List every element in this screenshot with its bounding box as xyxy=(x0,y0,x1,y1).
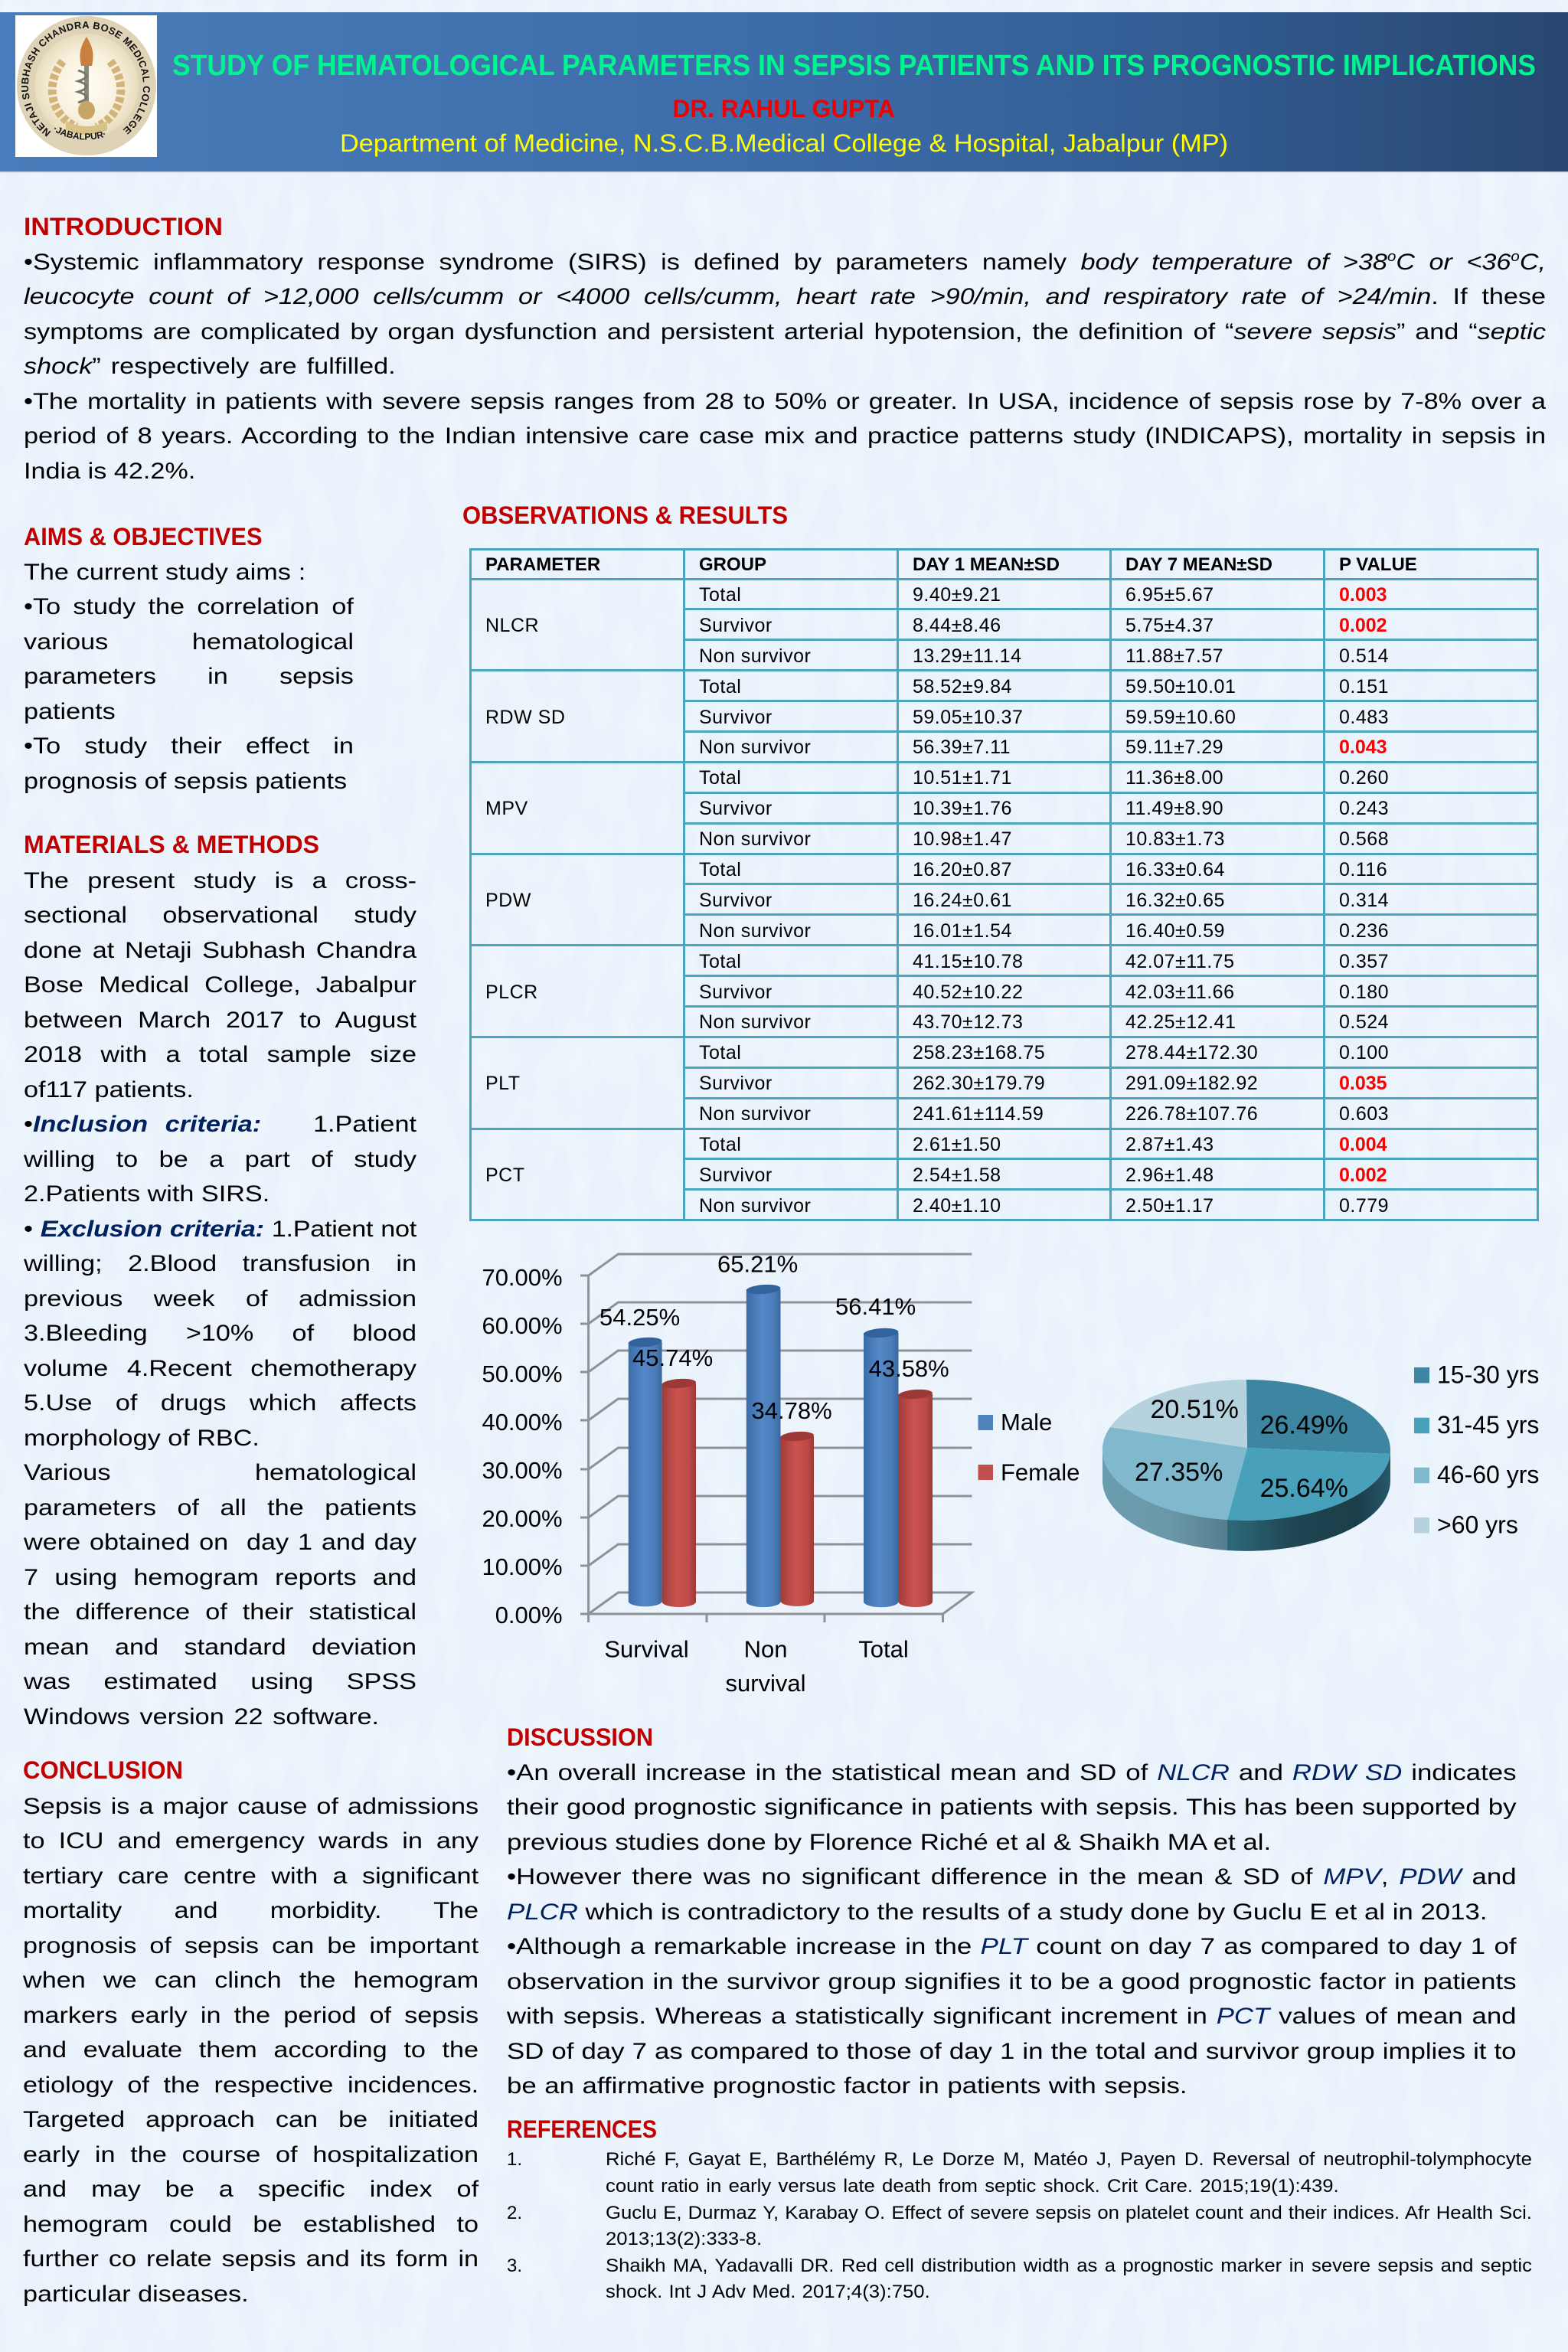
text: reference list: shock. Int J Adv Med. 2017;4(3):750. xyxy=(606,2282,930,2302)
text: introduction body: period of 8 years. According to the Indian intensive care case mix and practice patterns study (INDICAPS), mortality in sepsis in xyxy=(24,423,1546,449)
table: hematological parameters: 42.07±11.75 xyxy=(1125,951,1234,972)
table: hematological parameters: PCT xyxy=(485,1165,525,1186)
table: hematological parameters: Non survivor xyxy=(699,828,811,850)
text: materials and methods body: were obtained on day 1 and day xyxy=(24,1530,416,1555)
panel: materials and methods xyxy=(24,831,416,1730)
text: introduction body: leucocyte count of >12,000 cells/cumm or <4000 cells/cumm, heart rate >90/min, and respiratory rate of >24/min. If these xyxy=(24,284,1546,309)
table: hematological parameters: Survivor xyxy=(699,798,773,819)
text: discussion body xyxy=(507,1755,1517,2104)
table: hematological parameters: Survivor xyxy=(699,706,773,727)
text: materials and methods body: parameters of all the patients xyxy=(24,1495,416,1521)
text: aims body: •To study the correlation of xyxy=(24,594,354,619)
text: materials and methods body: volume 4.Recent chemotherapy xyxy=(24,1356,416,1381)
text: aims body: various hematological xyxy=(24,629,354,655)
table: hematological parameters: Total xyxy=(699,767,741,789)
legend: gender: Male xyxy=(1001,1409,1052,1436)
text: reference list: Shaikh MA, Yadavalli DR. Red cell distribution width as a prognostic marker in severe sepsis and septic xyxy=(606,2256,1532,2276)
pie side wall xyxy=(1102,1450,1390,1551)
table: hematological parameters: 0.002 xyxy=(1339,1165,1387,1186)
text: materials and methods body: 2018 with a total sample size xyxy=(24,1042,416,1067)
category labels xyxy=(604,1635,909,1697)
text: materials and methods body: Bose Medical College, Jabalpur xyxy=(24,972,416,998)
table: hematological parameters: 0.035 xyxy=(1339,1073,1387,1094)
logo: medical college emblem: ·JABALPUR· xyxy=(54,127,105,140)
table: hematological parameters: 0.483 xyxy=(1339,706,1389,727)
text: conclusion body: Targeted approach can be initiated xyxy=(23,2107,479,2132)
y axis labels: 60.00% xyxy=(482,1312,563,1339)
panel: references xyxy=(507,2109,1533,2308)
table: hematological parameters: 2.50±1.17 xyxy=(1125,1195,1214,1217)
text: materials and methods body: between March 2017 to August xyxy=(24,1008,416,1033)
table: hematological parameters: 11.36±8.00 xyxy=(1125,767,1223,789)
text: discussion body: with sepsis. Whereas a statistically significant increment in PCT values of mean and xyxy=(507,2004,1517,2029)
text: discussion body: SD of day 7 as compared to those of day 1 in the total and survivor group implies it to xyxy=(507,2038,1517,2064)
data labels: 43.58% xyxy=(869,1355,949,1382)
table: hematological parameters: Non survivor xyxy=(699,920,811,942)
reference numbers: 3. xyxy=(507,2256,522,2276)
table: hematological parameters: 10.83±1.73 xyxy=(1125,828,1225,850)
text: materials and methods body: Various hematological xyxy=(24,1460,416,1485)
bars: total xyxy=(864,1327,933,1607)
table: hematological parameters: 5.75±4.37 xyxy=(1125,615,1214,636)
text: introduction body xyxy=(24,249,1547,484)
y axis labels: 40.00% xyxy=(482,1409,563,1436)
table: hematological parameters: 2.54±1.58 xyxy=(913,1165,1001,1186)
text: conclusion body xyxy=(23,1789,479,2311)
table: hematological parameters: Non survivor xyxy=(699,1103,811,1125)
department: Department of Medicine, N.S.C.B.Medical College & Hospital, Jabalpur (MP) xyxy=(340,129,1228,157)
text: conclusion body: mortality and morbidity. The xyxy=(23,1898,479,1923)
table: hematological parameters: PDW xyxy=(485,890,531,911)
text: materials and methods body: 3.Bleeding >10% of blood xyxy=(24,1321,416,1346)
pie chart: age distribution xyxy=(1095,1355,1568,1562)
table: hematological parameters: RDW SD xyxy=(485,706,565,727)
text: materials and methods body: of117 patients. xyxy=(24,1077,193,1102)
table: hematological parameters: Total xyxy=(699,859,741,880)
text: aims body: The current study aims : xyxy=(24,560,305,585)
data labels: 45.74% xyxy=(632,1344,713,1371)
text: materials and methods body: willing; 2.Blood transfusion in xyxy=(24,1251,416,1276)
heading: aims and objectives: AIMS & OBJECTIVES xyxy=(24,523,262,550)
text: reference list: Guclu E, Durmaz Y, Karabay O. Effect of severe sepsis on platelet count and their indices. Afr Health Sci. xyxy=(606,2203,1532,2223)
text: conclusion body: and may be a specific index of xyxy=(23,2177,479,2202)
reference numbers xyxy=(507,2147,553,2306)
heading: references: REFERENCES xyxy=(507,2115,657,2143)
table: hematological parameters: Total xyxy=(699,951,741,972)
category labels: survival xyxy=(725,1670,806,1697)
table: hematological parameters: Non survivor xyxy=(699,645,811,667)
text: discussion body: observation in the survivor group signifies it to be a good prognostic factor in patients xyxy=(507,1969,1517,1994)
table: hematological parameters: 42.03±11.66 xyxy=(1125,982,1234,1003)
y axis labels: 70.00% xyxy=(482,1264,563,1291)
text: materials and methods body: 5.Use of drugs which affects xyxy=(24,1390,416,1416)
table: hematological parameters xyxy=(469,548,1539,1221)
table: hematological parameters: Total xyxy=(699,1042,741,1063)
heading: discussion: DISCUSSION xyxy=(507,1723,653,1751)
y axis labels xyxy=(482,1264,563,1628)
text: introduction body: shock” respectively are fulfilled. xyxy=(24,354,396,379)
bars: survival xyxy=(628,1336,696,1607)
data labels: 54.25% xyxy=(599,1304,680,1331)
y axis labels: 30.00% xyxy=(482,1457,563,1484)
table: hematological parameters: 41.15±10.78 xyxy=(913,951,1023,972)
table: hematological parameters: 0.002 xyxy=(1339,615,1387,636)
text: discussion body: •An overall increase in the statistical mean and SD of NLCR and RDW SD indicates xyxy=(507,1759,1517,1785)
table: hematological parameters: 262.30±179.79 xyxy=(913,1073,1045,1094)
heading: materials and methods: MATERIALS & METHODS xyxy=(24,831,319,858)
table: hematological parameters: 59.50±10.01 xyxy=(1125,676,1236,697)
table: hematological parameters: Non survivor xyxy=(699,1195,811,1217)
table: hematological parameters: 40.52±10.22 xyxy=(913,982,1023,1003)
text: conclusion body: etiology of the respective incidences. xyxy=(23,2073,479,2098)
table: hematological parameters: 0.004 xyxy=(1339,1134,1387,1155)
text: materials and methods body: The present study is a cross- xyxy=(24,868,416,893)
table: hematological parameters: 10.39±1.76 xyxy=(913,798,1012,819)
table: hematological parameters: 2.61±1.50 xyxy=(913,1134,1001,1155)
heading: observations and results: OBSERVATIONS & RESULTS xyxy=(462,501,788,529)
text: introduction body: India is 42.2%. xyxy=(24,459,195,484)
bars: non survival xyxy=(746,1283,814,1607)
table: hematological parameters: 278.44±172.30 xyxy=(1125,1042,1258,1063)
table: hematological parameters: 59.59±10.60 xyxy=(1125,706,1236,727)
table: hematological parameters: 0.779 xyxy=(1339,1195,1389,1217)
text: materials and methods body xyxy=(24,868,416,1730)
table: hematological parameters: 2.87±1.43 xyxy=(1125,1134,1214,1155)
table: hematological parameters: 42.25±12.41 xyxy=(1125,1011,1236,1033)
text: aims body: •To study their effect in xyxy=(24,733,354,759)
slice: over 60 yrs xyxy=(1110,1380,1247,1448)
table: hematological parameters: 226.78±107.76 xyxy=(1125,1103,1258,1125)
text: aims body xyxy=(24,560,354,794)
text: discussion body: PLCR which is contradictory to the results of a study done by Guclu E et al in 2013. xyxy=(507,1899,1488,1925)
text: discussion body: their good prognostic significance in patients with sepsis. This has been supported by xyxy=(507,1795,1517,1820)
table: hematological parameters: MPV xyxy=(485,798,528,819)
y axis labels: 0.00% xyxy=(495,1602,563,1628)
panel: observations and results xyxy=(462,498,1542,1225)
table: hematological parameters: 0.180 xyxy=(1339,982,1389,1003)
table: hematological parameters: 8.44±8.46 xyxy=(913,615,1001,636)
table: hematological parameters: 16.33±0.64 xyxy=(1125,859,1225,880)
text: introduction body: •The mortality in patients with severe sepsis ranges from 28 to 50% or greater. In USA, incidence of sepsis rose by 7-8% over a xyxy=(24,389,1546,414)
table: hematological parameters: 16.32±0.65 xyxy=(1125,890,1225,911)
category labels: Survival xyxy=(604,1635,689,1663)
panel: introduction xyxy=(24,213,1547,484)
legend: age groups: 31-45 yrs xyxy=(1437,1411,1539,1439)
y axis labels: 50.00% xyxy=(482,1361,563,1387)
table: hematological parameters: Total xyxy=(699,1134,741,1155)
table: hematological parameters: 258.23±168.75 xyxy=(913,1042,1045,1063)
text: discussion body: previous studies done by Florence Riché et al & Shaikh MA et al. xyxy=(507,1830,1271,1854)
table: hematological parameters: 0.514 xyxy=(1339,645,1389,667)
legend: age groups: 46-60 yrs xyxy=(1437,1461,1539,1488)
chart axes and gridlines xyxy=(580,1254,972,1622)
text: reference list: 2013;13(2):333-8. xyxy=(606,2229,762,2249)
table: hematological parameters: Survivor xyxy=(699,1073,773,1094)
panel: discussion xyxy=(507,1719,1517,2109)
table: hematological parameters: 0.151 xyxy=(1339,676,1389,697)
text: conclusion body: prognosis of sepsis can be important xyxy=(23,1933,479,1958)
table: hematological parameters: 13.29±11.14 xyxy=(913,645,1021,667)
category labels: Non xyxy=(744,1635,787,1663)
table: hematological parameters: 0.260 xyxy=(1339,767,1389,789)
text: materials and methods body: previous week of admission xyxy=(24,1286,416,1312)
table: hematological parameters: Survivor xyxy=(699,982,773,1003)
text: aims body: prognosis of sepsis patients xyxy=(24,769,347,794)
table: hematological parameters: 0.314 xyxy=(1339,890,1389,911)
legend: age groups xyxy=(1414,1361,1539,1539)
table: hematological parameters: 11.88±7.57 xyxy=(1125,645,1223,667)
text: materials and methods body: 2.Patients with SIRS. xyxy=(24,1181,270,1207)
legend: age groups: >60 yrs xyxy=(1437,1511,1518,1539)
text: aims body: parameters in sepsis xyxy=(24,664,354,689)
slice: 46-60 yrs xyxy=(1102,1427,1247,1520)
table: hematological parameters: 6.95±5.67 xyxy=(1125,584,1214,606)
text: materials and methods body: sectional observational study xyxy=(24,903,416,928)
table: hematological parameters: 9.40±9.21 xyxy=(913,584,1001,606)
table: hematological parameters: Survivor xyxy=(699,1165,773,1186)
table: hematological parameters: 16.20±0.87 xyxy=(913,859,1012,880)
heading: introduction: INTRODUCTION xyxy=(24,213,223,240)
table: hematological parameters: 16.01±1.54 xyxy=(913,920,1012,942)
table: hematological parameters: 59.05±10.37 xyxy=(913,706,1023,727)
data labels: 56.41% xyxy=(835,1293,916,1320)
text: materials and methods body: •Inclusion criteria: 1.Patient xyxy=(24,1112,416,1137)
text: reference list: Riché F, Gayat E, Barthélémy R, Le Dorze M, Matéo J, Payen D. Reversal of neutrophil-tolymphocyte xyxy=(606,2149,1532,2170)
text: materials and methods body: mean and standard deviation xyxy=(24,1635,416,1660)
text: materials and methods body: 7 using hemogram reports and xyxy=(24,1565,416,1590)
table: hematological parameters: 2.40±1.10 xyxy=(913,1195,1001,1217)
text: conclusion body: and evaluate them according to the xyxy=(23,2037,479,2063)
pie labels xyxy=(1135,1395,1348,1503)
logo: medical college emblem: NETAJI SUBHASH CHANDRA BOSE MEDICAL COLLEGE xyxy=(21,21,150,136)
table: hematological parameters: 0.243 xyxy=(1339,798,1389,819)
text: conclusion body: early in the course of hospitalization xyxy=(23,2142,479,2167)
category labels: Total xyxy=(858,1635,909,1663)
text: introduction body: •Systemic inflammatory response syndrome (SIRS) is defined by parameters namely body temperature of >38oC or <36oC, xyxy=(24,249,1546,275)
pie labels: 26.49% xyxy=(1260,1411,1348,1440)
table: hematological parameters: 0.100 xyxy=(1339,1042,1389,1063)
table: hematological parameters: 16.24±0.61 xyxy=(913,890,1012,911)
table: hematological parameters: PLCR xyxy=(485,982,538,1003)
reference numbers: 2. xyxy=(507,2203,522,2223)
text: materials and methods body: Windows version 22 software. xyxy=(24,1704,379,1730)
table: hematological parameters: 0.116 xyxy=(1339,859,1387,880)
table: hematological parameters: DAY 1 MEAN±SD xyxy=(913,554,1060,575)
text: conclusion body: Sepsis is a major cause of admissions xyxy=(23,1794,479,1819)
panel: aims and objectives xyxy=(24,523,354,794)
table: hematological parameters: 10.51±1.71 xyxy=(913,767,1012,789)
pie labels: 25.64% xyxy=(1260,1474,1348,1503)
table: hematological parameters: 0.357 xyxy=(1339,951,1389,972)
text: discussion body: be an affirmative prognostic factor in patients with sepsis. xyxy=(507,2073,1187,2099)
table: hematological parameters: GROUP xyxy=(699,554,766,575)
legend: gender: Female xyxy=(1001,1459,1080,1485)
table: hematological parameters: Non survivor xyxy=(699,1011,811,1033)
table: hematological parameters: 43.70±12.73 xyxy=(913,1011,1023,1033)
table: hematological parameters: 2.96±1.48 xyxy=(1125,1165,1214,1186)
table: hematological parameters: 0.003 xyxy=(1339,584,1387,606)
y axis labels: 20.00% xyxy=(482,1505,563,1532)
text: materials and methods body: done at Netaji Subhash Chandra xyxy=(24,938,416,963)
slice: 31-45 yrs xyxy=(1227,1448,1390,1521)
table: hematological parameters: Total xyxy=(699,584,741,606)
table: hematological parameters: 241.61±114.59 xyxy=(913,1103,1044,1125)
text: materials and methods body: morphology of RBC. xyxy=(24,1426,260,1451)
table: hematological parameters: 10.98±1.47 xyxy=(913,828,1012,850)
text: reference list xyxy=(606,2147,1532,2306)
table: hematological parameters: 0.043 xyxy=(1339,737,1387,758)
text: conclusion body: tertiary care centre with a significant xyxy=(23,1864,479,1889)
data labels: 34.78% xyxy=(752,1397,832,1424)
text: reference list: count ratio in early versus late death from septic shock. Crit Care. 2015;19(1):439. xyxy=(606,2176,1339,2197)
table: hematological parameters: PARAMETER xyxy=(485,554,600,575)
table: hematological parameters: Survivor xyxy=(699,615,773,636)
table: hematological parameters: P VALUE xyxy=(1339,554,1417,575)
text: conclusion body: to ICU and emergency wards in any xyxy=(23,1828,479,1854)
table: hematological parameters: Total xyxy=(699,676,741,697)
table: hematological parameters: 59.11±7.29 xyxy=(1125,737,1223,758)
text: aims body: patients xyxy=(24,699,116,724)
table: hematological parameters: 0.568 xyxy=(1339,828,1389,850)
table: hematological parameters: Non survivor xyxy=(699,737,811,758)
panel: conclusion xyxy=(23,1756,479,2307)
text: materials and methods body: the difference of their statistical xyxy=(24,1599,416,1625)
table: hematological parameters: 11.49±8.90 xyxy=(1125,798,1223,819)
table: hematological parameters: 291.09±182.92 xyxy=(1125,1073,1258,1094)
table: hematological parameters: NLCR xyxy=(485,615,539,636)
y axis labels: 10.00% xyxy=(482,1553,563,1580)
text: conclusion body: when we can clinch the hemogram xyxy=(23,1968,479,1993)
text: conclusion body: hemogram could be established to xyxy=(23,2212,479,2237)
data labels: 65.21% xyxy=(717,1251,798,1277)
legend: age groups: 15-30 yrs xyxy=(1437,1361,1539,1389)
table: hematological parameters: 0.603 xyxy=(1339,1103,1389,1125)
table: hematological parameters: PLT xyxy=(485,1073,521,1094)
slice: 15-30 yrs xyxy=(1246,1380,1390,1454)
pie labels: 20.51% xyxy=(1150,1395,1239,1424)
text: introduction body: symptoms are complicated by organ dysfunction and persistent arterial hypotension, the definition of “severe sepsis” and “septic xyxy=(24,319,1546,345)
table: hematological parameters: 0.236 xyxy=(1339,920,1389,942)
text: conclusion body: markers early in the period of sepsis xyxy=(23,2003,479,2028)
text: conclusion body: further co relate sepsis and its form in xyxy=(23,2246,479,2272)
legend: gender xyxy=(978,1409,1080,1485)
text: materials and methods body: willing to be a part of study xyxy=(24,1147,416,1172)
text: conclusion body: particular diseases. xyxy=(23,2282,249,2307)
table: hematological parameters: 56.39±7.11 xyxy=(913,737,1011,758)
pie labels: 27.35% xyxy=(1135,1458,1223,1487)
header banner xyxy=(0,12,1568,173)
text: materials and methods body: • Exclusion criteria: 1.Patient not xyxy=(24,1217,416,1242)
text: discussion body: •Although a remarkable increase in the PLT count on day 7 as compared to day 1 of xyxy=(507,1934,1517,1959)
reference numbers: 1. xyxy=(507,2149,522,2170)
author name: DR. RAHUL GUPTA xyxy=(672,95,895,122)
table: hematological parameters: 58.52±9.84 xyxy=(913,676,1012,697)
text: materials and methods body: was estimated using SPSS xyxy=(24,1669,416,1694)
table: hematological parameters: 16.40±0.59 xyxy=(1125,920,1225,942)
bar chart: gender distribution xyxy=(475,1240,1087,1707)
data labels xyxy=(599,1251,949,1424)
table: hematological parameters: Survivor xyxy=(699,890,773,911)
text: discussion body: •However there was no significant difference in the mean & SD of MPV, PDW and xyxy=(507,1864,1517,1890)
table: hematological parameters: DAY 7 MEAN±SD xyxy=(1125,554,1272,575)
table: hematological parameters: 0.524 xyxy=(1339,1011,1389,1033)
heading: conclusion: CONCLUSION xyxy=(23,1756,183,1784)
